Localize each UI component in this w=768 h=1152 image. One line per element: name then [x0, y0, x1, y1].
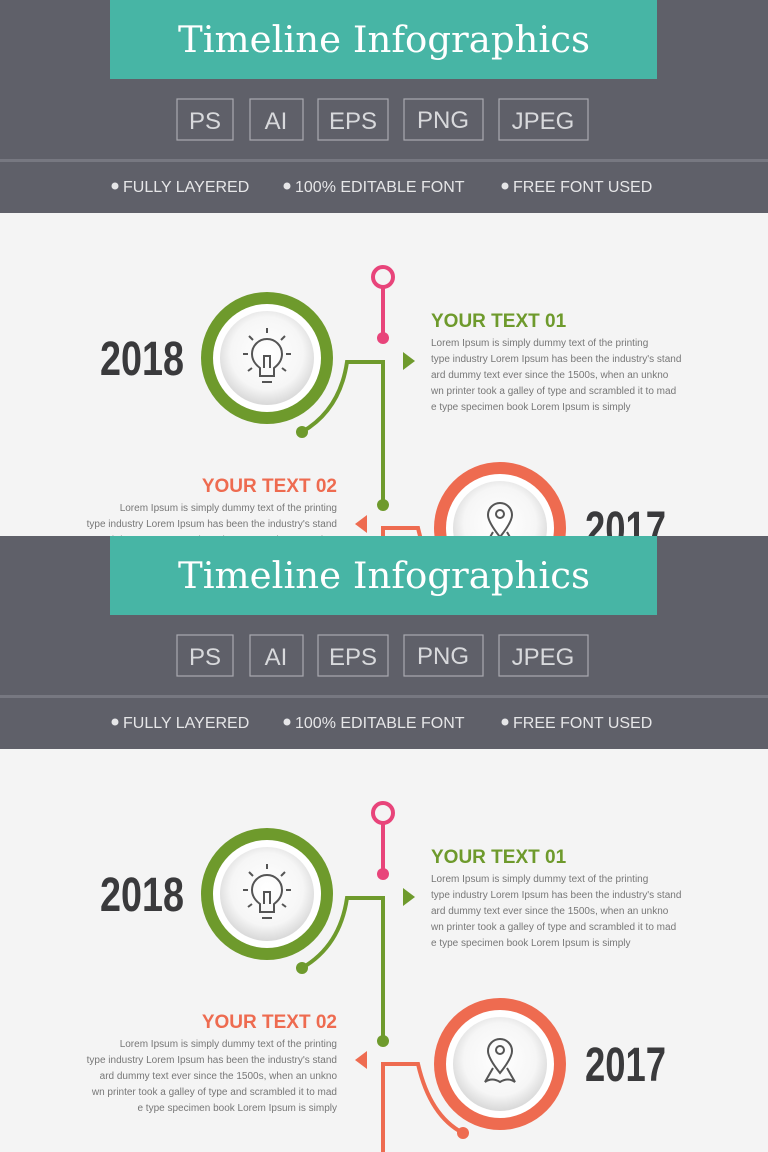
format boxes	[177, 635, 588, 676]
orange connector	[355, 1051, 469, 1152]
format boxes: PS	[189, 108, 221, 135]
text block 01: e type specimen book Lorem Ipsum is simply	[431, 938, 631, 949]
feature bullets: FREE FONT USED	[513, 179, 652, 196]
text block 01: YOUR TEXT 01	[431, 311, 567, 332]
header background	[0, 0, 768, 213]
pink start marker	[373, 803, 393, 880]
text block 02: wn printer took a galley of type and scrambled it to mad	[91, 1087, 337, 1098]
format boxes: JPEG	[512, 644, 574, 671]
format boxes: EPS	[329, 108, 377, 135]
format boxes: AI	[265, 644, 287, 671]
header background	[0, 536, 768, 749]
text block 01	[430, 847, 681, 949]
text block 02: type industry Lorem Ipsum has been the industry's stand	[87, 519, 337, 530]
format boxes: EPS	[329, 644, 377, 671]
pink start marker	[373, 267, 393, 344]
format boxes: JPEG	[512, 108, 574, 135]
text block 01: Lorem Ipsum is simply dummy text of the printing	[431, 338, 648, 349]
title banner	[110, 536, 657, 615]
format boxes: AI	[265, 108, 287, 135]
feature bullets: FULLY LAYERED	[123, 179, 249, 196]
text block 02	[87, 1012, 337, 1114]
text block 01: ard dummy text ever since the 1500s, when an unkno	[431, 370, 669, 381]
panel: top copy	[0, 0, 768, 536]
text block 01: e type specimen book Lorem Ipsum is simply	[431, 402, 631, 413]
feature bullets: FREE FONT USED	[513, 715, 652, 732]
text block 02: e type specimen book Lorem Ipsum is simply	[137, 1103, 337, 1114]
text block 02: ard dummy text ever since the 1500s, when an unkno	[100, 1071, 337, 1082]
orange ring with pin	[434, 998, 566, 1130]
year 2018: 2018	[100, 333, 184, 386]
text block 02: YOUR TEXT 02	[202, 1012, 337, 1033]
format boxes	[177, 99, 588, 140]
title banner: Timeline Infographics	[178, 20, 590, 61]
feature bullets: 100% EDITABLE FONT	[295, 179, 465, 196]
year 2017: 2017	[585, 1039, 666, 1092]
text block 01: type industry Lorem Ipsum has been the industry's stand	[431, 354, 681, 365]
green ring with bulb	[201, 292, 333, 424]
year 2018: 2018	[100, 869, 184, 922]
feature bullets	[112, 179, 652, 196]
feature bullets: FULLY LAYERED	[123, 715, 249, 732]
text block 01: Lorem Ipsum is simply dummy text of the printing	[431, 874, 648, 885]
green ring with bulb	[201, 828, 333, 960]
text block 02	[87, 476, 337, 578]
text block 01: wn printer took a galley of type and scrambled it to mad	[430, 386, 676, 397]
format boxes: PNG	[417, 643, 469, 670]
text block 02: Lorem Ipsum is simply dummy text of the printing	[120, 1039, 337, 1050]
green connector	[296, 888, 415, 1047]
panel: bottom copy	[0, 536, 768, 1152]
title banner: Timeline Infographics	[178, 556, 590, 597]
text block 01	[430, 311, 681, 413]
text block 02: Lorem Ipsum is simply dummy text of the printing	[120, 503, 337, 514]
feature bullets: 100% EDITABLE FONT	[295, 715, 465, 732]
orange connector	[355, 515, 469, 616]
title banner	[110, 0, 657, 79]
text block 01: wn printer took a galley of type and scrambled it to mad	[430, 922, 676, 933]
feature bullets	[112, 715, 652, 732]
format boxes: PNG	[417, 107, 469, 134]
text block 01: YOUR TEXT 01	[431, 847, 567, 868]
text block 02: YOUR TEXT 02	[202, 476, 337, 497]
green connector	[296, 352, 415, 511]
format boxes: PS	[189, 644, 221, 671]
text block 01: type industry Lorem Ipsum has been the industry's stand	[431, 890, 681, 901]
text block 02: type industry Lorem Ipsum has been the industry's stand	[87, 1055, 337, 1066]
orange ring with pin	[434, 462, 566, 594]
text block 01: ard dummy text ever since the 1500s, when an unkno	[431, 906, 669, 917]
